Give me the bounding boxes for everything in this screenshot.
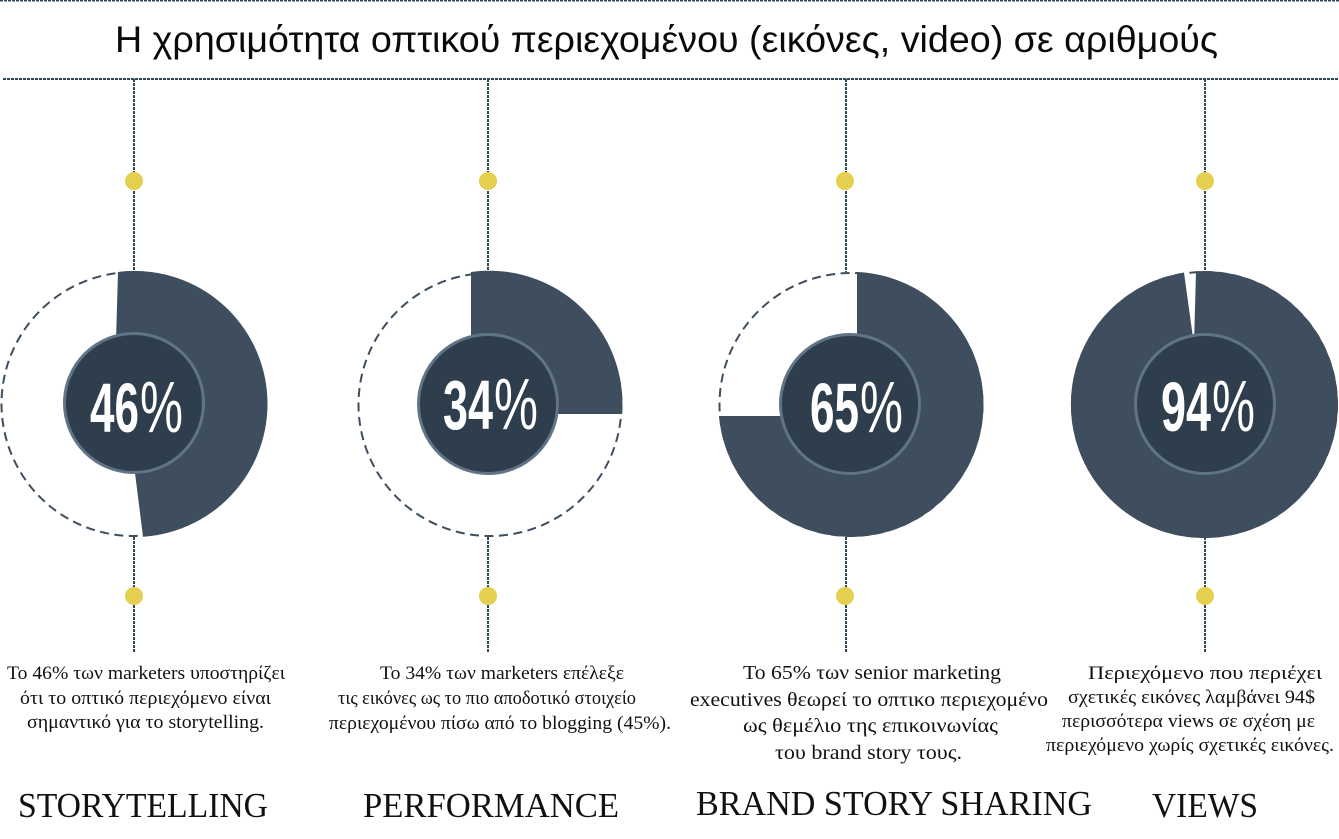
icon: yellow dot top 1: [125, 172, 143, 190]
text block 1: Το 46% των marketers υποστηρίζει: [7, 663, 286, 684]
panel: views: [1046, 79, 1338, 825]
text block 4: περισσότερα views σε σχέση με: [1062, 711, 1315, 732]
icon: yellow dot top 4: [1196, 172, 1214, 190]
heading: views: VIEWS: [1152, 786, 1258, 825]
donut chart 65%: 65: [810, 369, 859, 447]
panel: performance: [329, 79, 671, 825]
heading: performance: PERFORMANCE: [363, 786, 619, 825]
icon: yellow dot bottom 2: [479, 587, 497, 605]
title: Η χρησιμότητα οπτικού περιεχομένου (εικόνες, video) σε αριθμούς: [115, 18, 1218, 60]
icon: yellow dot top 2: [479, 172, 497, 190]
text block 4: περιεχόμενο χωρίς σχετικές εικόνες.: [1046, 735, 1334, 756]
donut chart 34%: 34: [443, 366, 493, 444]
text block 2: περιεχομένου πίσω από το blogging (45%).: [329, 714, 671, 734]
text block 2: Το 34% των marketers επέλεξε: [380, 664, 624, 684]
heading: brand story sharing: BRAND STORY SHARING: [696, 784, 1092, 823]
panel: brand story sharing: [690, 79, 1092, 823]
donut chart 34%: %: [494, 365, 538, 445]
donut chart 46%: 46: [90, 369, 139, 447]
donut chart 34%: [358, 271, 622, 536]
donut chart 94%: 94: [1161, 368, 1211, 446]
text block 3: Το 65% των senior marketing: [743, 662, 1001, 684]
text block 1: σημαντικό για το storytelling.: [27, 712, 264, 733]
icon: yellow dot bottom 3: [836, 587, 854, 605]
donut chart 46%: %: [140, 368, 183, 448]
heading: storytelling: STORYTELLING: [18, 786, 268, 825]
donut chart 65%: [719, 272, 983, 537]
text block 1: ότι το οπτικό περιεχόμενο είναι: [20, 688, 272, 709]
panel: storytelling: [2, 79, 290, 825]
icon: yellow dot bottom 4: [1196, 587, 1214, 605]
text block 3: executives θεωρεί το οπτικο περιεχομένο: [690, 689, 1048, 711]
donut chart 94%: [1071, 271, 1338, 538]
donut chart 46%: [2, 271, 268, 537]
donut chart 65%: %: [860, 368, 903, 448]
donut chart 94%: %: [1212, 367, 1255, 447]
text block 3: ως θεμέλιο της επικοινωνίας: [743, 715, 998, 737]
text block 3: του brand story τους.: [775, 742, 962, 764]
text block 4: Περιεχόμενο που περιέχει: [1088, 663, 1323, 684]
text block 2: τις εικόνες ως το πιο αποδοτικό στοιχείο: [338, 689, 636, 709]
icon: yellow dot top 3: [836, 172, 854, 190]
text block 4: σχετικές εικόνες λαμβάνει 94$: [1068, 687, 1315, 708]
icon: yellow dot bottom 1: [125, 587, 143, 605]
